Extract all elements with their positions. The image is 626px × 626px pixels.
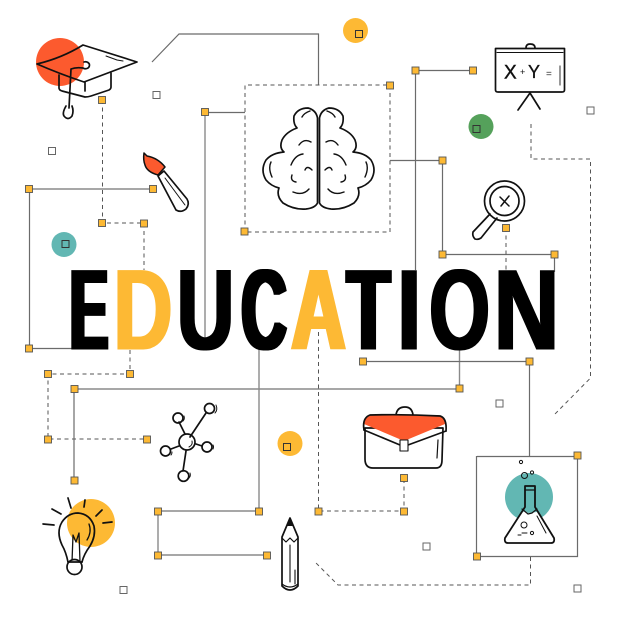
accent dot: teal	[52, 232, 76, 257]
title: EDUCATION: U	[177, 244, 234, 374]
title: EDUCATION: C	[242, 245, 287, 374]
icon: light bulb	[43, 498, 115, 574]
title: EDUCATION: I	[399, 246, 419, 375]
accent dot: yellow middle	[278, 431, 302, 456]
icon: presentation board: =	[546, 69, 552, 80]
title: EDUCATION: D	[114, 246, 172, 375]
title: EDUCATION: N	[494, 245, 559, 374]
icon: presentation board: X	[504, 62, 517, 84]
icon: graduation cap	[36, 38, 137, 118]
icon: presentation board: Y	[528, 62, 540, 82]
icon: paint brush	[144, 153, 188, 211]
accent dot: yellow top	[343, 18, 368, 43]
icon: brain	[263, 108, 374, 209]
title: EDUCATION: O	[429, 245, 490, 374]
icon: flask	[504, 460, 554, 543]
icon: magnifying glass	[473, 181, 524, 239]
icon: presentation board	[496, 44, 564, 110]
connector lines network	[29, 34, 590, 585]
title: EDUCATION: A	[292, 245, 345, 374]
connector nodes	[26, 67, 581, 560]
title: EDUCATION: E	[70, 247, 108, 375]
accent dot: green	[468, 114, 494, 139]
title: EDUCATION	[70, 244, 559, 375]
icon: presentation board: +	[520, 67, 525, 77]
small hollow squares	[48, 92, 594, 594]
icon: pencil	[282, 518, 298, 590]
icon: molecule	[160, 404, 217, 481]
icon: briefcase	[364, 407, 446, 468]
title: EDUCATION: T	[347, 246, 390, 375]
